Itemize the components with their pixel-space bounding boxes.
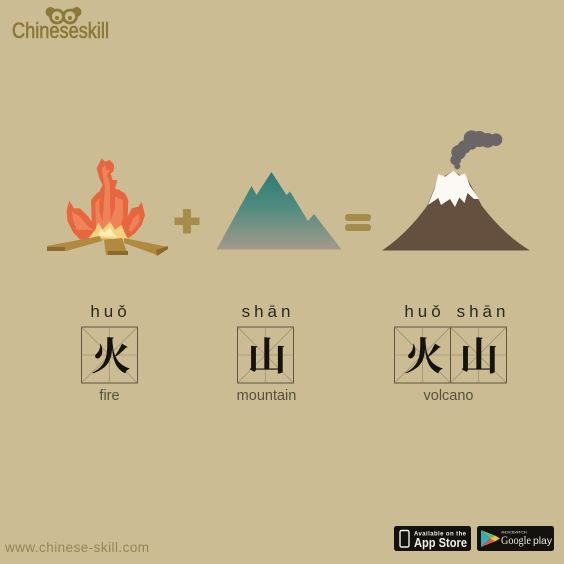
flames	[67, 158, 145, 239]
icon: campfire	[47, 158, 168, 256]
badge: App Store: App Store	[414, 536, 467, 550]
badge: App Store	[394, 526, 471, 551]
column: fire word	[82, 302, 138, 404]
pinyin: shan: shān	[457, 302, 509, 321]
badge: Google play: Google	[501, 533, 531, 547]
column: mountain word	[237, 302, 296, 404]
character boxes: volcano	[394, 327, 506, 383]
column: volcano word	[394, 302, 509, 404]
translation: mountain: mountain	[237, 388, 296, 404]
icon: volcano	[382, 130, 530, 250]
icon: equals sign	[345, 214, 371, 231]
badge: App Store: Available on the	[414, 532, 467, 538]
badge: Google play: ANDROID APP ON	[501, 530, 527, 534]
snow cap	[428, 171, 479, 207]
translation: volcano: volcano	[424, 388, 473, 404]
icon: panda ears and eyes	[46, 7, 82, 23]
badge: Google play: play	[533, 535, 553, 547]
pinyin: huo: huǒ	[404, 302, 445, 321]
logo wordmark: Chineseskill	[12, 18, 109, 43]
icon: play triangle	[481, 530, 500, 547]
logo: Chineseskill panda	[12, 7, 109, 43]
character box: fire: 火	[91, 336, 131, 379]
character boxes: volcano: 火	[404, 336, 444, 379]
website url: www.chinese-skill.com	[4, 540, 149, 555]
icon: plus sign	[175, 210, 199, 233]
badge: Google play	[477, 526, 554, 551]
character boxes: volcano: 山	[459, 336, 499, 379]
smoke plume	[450, 130, 502, 169]
pinyin: huo: huǒ	[90, 302, 131, 321]
translation: fire: fire	[99, 388, 120, 404]
logs	[47, 236, 168, 256]
icon: mountain	[216, 172, 342, 250]
character box: mountain: 山	[247, 336, 287, 379]
pinyin: shan: shān	[242, 302, 294, 321]
icon: phone	[400, 530, 409, 547]
mountain body	[382, 171, 530, 250]
